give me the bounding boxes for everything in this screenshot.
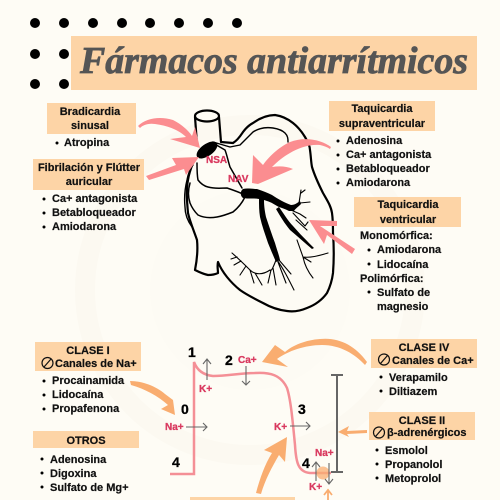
phase numbers: 0 xyxy=(181,401,189,417)
panel: clase IV: Diltiazem xyxy=(389,386,438,398)
panel: taquicardia supraventricular: Adenosina xyxy=(346,135,403,147)
ion labels: K+ xyxy=(199,384,212,395)
panel: bradicardia sinusal: Bradicardia xyxy=(60,106,121,118)
panel: bradicardia sinusal xyxy=(47,103,136,149)
label: NAV: NAV xyxy=(228,174,249,185)
panel: taquicardia supraventricular: Betabloqueador xyxy=(346,163,430,175)
panel: taquicardia ventricular: Taquicardia xyxy=(378,199,439,211)
panel: clase I: CLASE I xyxy=(66,345,110,357)
panel: taquicardia supraventricular xyxy=(329,101,435,189)
phase numbers: 1 xyxy=(188,344,196,360)
panel: clase I: Procainamida xyxy=(52,375,125,387)
panel: otros xyxy=(33,431,139,494)
panel: clase I: Canales de Na+ xyxy=(55,358,137,370)
phase 4 marker xyxy=(316,466,330,480)
arrow: supraventricular to NAV xyxy=(252,139,331,184)
phase numbers: 2 xyxy=(225,352,233,368)
panel: clase IV: Canales de Ca+ xyxy=(392,355,474,367)
panel: fibrilación y flútter auricular: Amiodarona xyxy=(52,221,117,233)
panel: taquicardia ventricular: Lidocaína xyxy=(377,259,429,271)
panel: clase I: Lidocaína xyxy=(52,389,104,401)
panel: clase III box (cropped) xyxy=(190,497,295,500)
panel: taquicardia supraventricular: supraventricular xyxy=(339,118,426,130)
panel: fibrilación y flútter auricular xyxy=(33,159,144,233)
arrow: clase I to phase 0 xyxy=(130,381,175,415)
panel: taquicardia supraventricular: Amiodarona xyxy=(346,177,411,189)
panel: taquicardia ventricular: Amiodarona xyxy=(377,244,442,256)
arrow: lower box to K+ xyxy=(256,437,287,494)
panel: clase II: Esmolol xyxy=(385,445,428,457)
panel: clase II: β-adrenérgicos xyxy=(387,427,466,439)
panel: bradicardia sinusal: Atropina xyxy=(64,137,110,149)
heart diagram xyxy=(185,110,334,311)
panel: fibrilación y flútter auricular: auricular xyxy=(66,176,113,188)
panel: clase II: CLASE II xyxy=(399,415,445,427)
panel: otros: Sulfato de Mg+ xyxy=(50,482,129,494)
panel: bradicardia sinusal: sinusal xyxy=(71,120,109,132)
panel: fibrilación y flútter auricular: Ca+ antagonista xyxy=(52,193,138,205)
panel: clase IV xyxy=(371,339,477,398)
arrow: ventricular xyxy=(309,220,355,254)
panel: otros: OTROS xyxy=(66,435,106,447)
label: NSA: NSA xyxy=(206,155,227,166)
ion labels: K+ xyxy=(309,482,322,493)
panel: taquicardia ventricular: Sulfato de xyxy=(377,287,430,299)
panel: clase IV: CLASE IV xyxy=(399,342,450,354)
arrow: clase II to bar xyxy=(338,426,367,437)
panel: clase IV: Verapamilo xyxy=(389,372,448,384)
decorative dots xyxy=(30,18,242,89)
panel: taquicardia ventricular xyxy=(354,197,461,313)
arrow: fibrilación to NSA xyxy=(146,157,199,180)
panel: taquicardia ventricular: ventricular xyxy=(380,214,437,226)
title: Fármacos antiarrítmicos xyxy=(79,40,468,82)
panel: fibrilación y flútter auricular: Fibrilación y Flútter xyxy=(38,162,141,174)
panel: fibrilación y flútter auricular: Betabloqueador xyxy=(52,207,136,219)
panel: clase I: Propafenona xyxy=(52,403,120,415)
ion current arrows xyxy=(186,359,333,484)
panel: taquicardia ventricular: Polimórfica: xyxy=(360,273,424,285)
panel: taquicardia supraventricular: Taquicardia xyxy=(352,103,413,115)
phase numbers: 3 xyxy=(298,401,306,417)
panel: otros: Digoxina xyxy=(50,468,97,480)
panel: clase II xyxy=(369,412,475,485)
phase numbers: 4 xyxy=(302,455,310,471)
panel: taquicardia ventricular: Monomórfica: xyxy=(360,230,433,242)
ion labels: Na+ xyxy=(315,448,334,459)
arrow: clase IV to Ca+ xyxy=(262,339,367,367)
panel: clase I xyxy=(35,342,141,415)
arrow: bradicardia to NSA xyxy=(138,118,200,148)
action potential curve xyxy=(170,362,331,474)
panel: otros: Adenosina xyxy=(50,454,107,466)
ion labels xyxy=(165,355,334,493)
refractory period bar xyxy=(331,375,343,472)
ion labels: Na+ xyxy=(165,422,184,433)
panel: clase II: Metoprolol xyxy=(385,473,441,485)
panel: clase II: Propanolol xyxy=(385,459,442,471)
panel: taquicardia supraventricular: Ca+ antagonista xyxy=(346,149,432,161)
ion labels: Ca+ xyxy=(238,355,257,366)
arrow: small up to phase 4 xyxy=(324,490,332,500)
phase numbers: 4 xyxy=(172,454,180,470)
ion labels: K+ xyxy=(274,422,287,433)
panel: taquicardia ventricular: magnesio xyxy=(377,301,429,313)
phase numbers xyxy=(172,344,310,471)
